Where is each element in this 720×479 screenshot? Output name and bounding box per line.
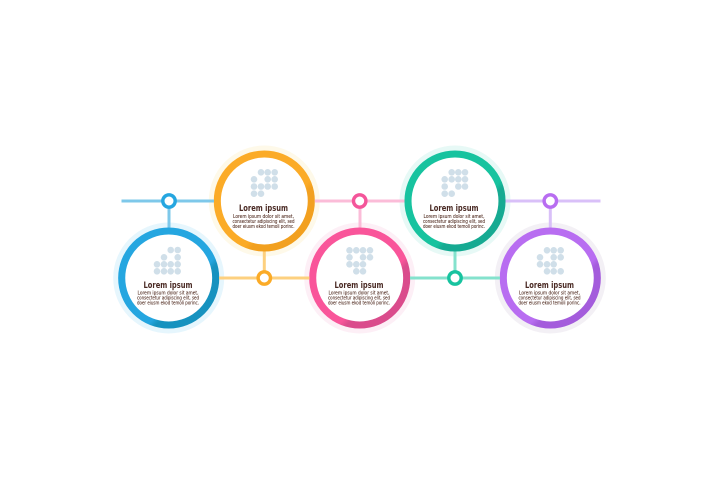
heading: Lorem ipsum [334,280,384,290]
panel: orange step [209,146,320,256]
halo [304,222,415,334]
body text: doer eiusm ekod temoli porinc. [232,224,295,230]
ring [122,231,216,325]
body text: consectetur adipiscing elit, sed [328,296,390,302]
node: orange [258,272,270,284]
panel: pink step [304,222,415,334]
body text: Lorem ipsum dolor sit amet, [233,214,294,220]
body text: doer eiusm ekod temoli porinc. [137,300,199,306]
panel: green step [400,146,510,256]
ring [503,231,597,325]
ring [408,154,502,248]
body text: doer eiusm ekod temoli porinc. [518,300,581,306]
body text [232,214,295,230]
body text [518,290,581,306]
heading: Lorem ipsum [525,280,574,290]
node: purple [544,195,556,207]
connector line: green [410,252,500,278]
body text: Lorem ipsum dolor sit amet, [424,214,485,220]
body text [328,290,390,306]
node: pink [354,195,366,207]
body text: consectetur adipiscing elit, sed [518,296,580,302]
icon: dot grid [537,247,564,275]
body text: Lorem ipsum dolor sit amet, [138,290,199,296]
connector line: orange [219,252,310,278]
icon: dot grid [154,247,181,275]
icon: dot grid [441,169,468,197]
connector line: purple [506,201,600,228]
body text: doer eiusm ekod temoli porinc. [328,300,390,306]
body text [423,214,485,230]
body text: consectetur adipiscing elit, sed [423,219,485,225]
body text: Lorem ipsum dolor sit amet, [328,290,390,296]
heading: Lorem ipsum [430,203,479,213]
body text: consectetur adipiscing elit, sed [137,296,199,302]
body text [137,290,199,306]
heading: Lorem ipsum [144,280,193,290]
halo [495,222,606,334]
body text: Lorem ipsum dolor sit amet, [519,290,580,296]
panel: purple step [495,222,606,334]
node: green [449,272,461,284]
connector line: blue [122,201,214,228]
icon: dot grid [251,169,278,197]
halo [113,222,224,334]
ring [313,231,407,325]
ring [217,154,311,248]
heading: Lorem ipsum [239,203,288,213]
halo [400,146,510,256]
body text: doer eiusm ekod temoli porinc. [423,224,485,230]
halo [209,146,320,256]
node: blue [163,195,175,207]
body text: consectetur adipiscing elit, sed [232,219,294,225]
connector line: pink [315,201,404,228]
panel: blue step [113,222,224,334]
icon: dot grid [346,247,373,275]
